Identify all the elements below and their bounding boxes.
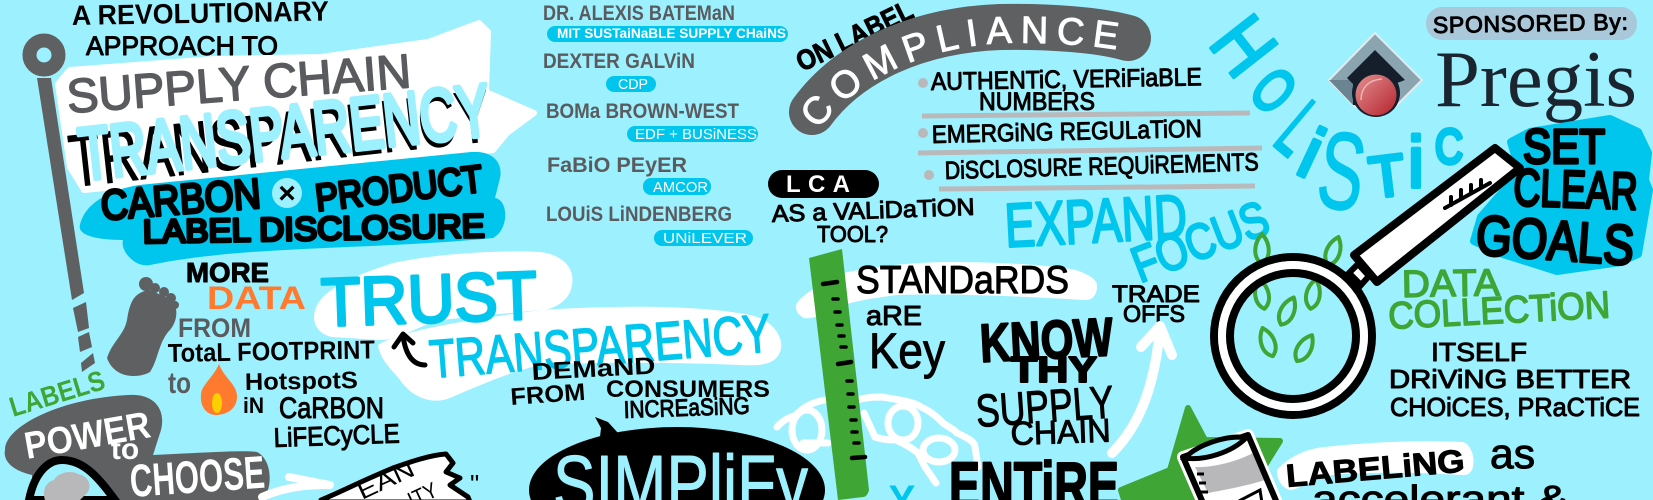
list: compliance points: NUMBERS: [979, 88, 1095, 116]
text: know thy supply chain: SUPPLY: [974, 375, 1115, 437]
panelist: Fabio Peyer: [547, 154, 711, 196]
text: demand from consumers increasing: [510, 353, 770, 424]
icon: flame: [201, 364, 237, 415]
ruler: [809, 249, 869, 500]
chain illustration: [777, 397, 978, 483]
text: standards are key: STANDaRDS: [856, 259, 1069, 302]
blob: set clear goals: SET: [1523, 121, 1605, 174]
text: trade offs: TRADE: [1112, 281, 1200, 308]
heading: holistic: H: [1193, 0, 1294, 93]
text: hotspots in carbon lifecycle: CaRBON: [279, 392, 384, 425]
heading: holistic: L: [1259, 84, 1339, 173]
subtitle band: carbon and product label disclosure: [80, 152, 505, 265]
band behind standards: [796, 262, 1097, 318]
text: know thy supply chain: CHAIN: [1010, 412, 1111, 452]
heading: transparency: [65, 68, 494, 203]
blob: trust: [314, 251, 573, 340]
text: standards are key: [856, 259, 1069, 379]
text: itself driving better choices: [1389, 337, 1640, 422]
subtitle band: carbon and product label disclosure: ×: [278, 177, 296, 210]
panelist: Boma Brown-West: BOMa BROWN-WEST: [546, 100, 739, 123]
panelist: Louis Lindenberg: [546, 203, 753, 247]
subtitle band: carbon and product label disclosure: LABEL DISCLOSURE: [142, 207, 485, 250]
text: standards are key: aRE: [866, 300, 922, 331]
text: trade offs: OFFS: [1123, 301, 1185, 328]
title: a revolutionary approach: APPROACH TO: [86, 31, 278, 61]
blob: power to choose: POWER: [21, 404, 154, 468]
text: standards are key: Key: [869, 323, 945, 379]
leaves: [1253, 234, 1345, 364]
text: know thy supply chain: KNOW: [978, 307, 1114, 374]
text: more data from total footprint: [168, 257, 375, 400]
text: hotspots in carbon lifecycle: LiFECyCLE: [273, 419, 400, 453]
speech burst: ": [470, 469, 479, 499]
panelist: Alexis Bateman: DR. ALEXIS BATEMaN: [543, 2, 735, 25]
heading: holistic: O: [1237, 55, 1309, 127]
speech burst: [321, 454, 479, 500]
text: hotspots in carbon lifecycle: HotspotS: [245, 367, 358, 396]
heading: supply chain: SUPPLY CHAIN: [65, 45, 413, 124]
panelist: Dexter Galvin: CDP: [618, 76, 648, 93]
subtitle band: carbon and product label disclosure: CARBON: [99, 170, 262, 229]
speech bubble: simplify: [529, 417, 825, 500]
arrow: white to speech burst: [262, 477, 330, 497]
text: know thy supply chain: THY: [1011, 349, 1097, 390]
panelist: Dexter Galvin: DEXTER GALViN: [543, 50, 695, 73]
icon: star: [1121, 408, 1280, 500]
list: compliance points: AUTHENTiC, VERiFiaBLE: [931, 63, 1202, 96]
text: expand focus: EXPAND: [1003, 183, 1188, 261]
panelist: Louis Lindenberg: LOUiS LiNDENBERG: [546, 203, 732, 226]
text: more data from total footprint: to: [168, 367, 191, 400]
text: more data from total footprint: MORE: [186, 257, 269, 288]
panelist: Dexter Galvin: [543, 50, 695, 93]
text: demand from consumers increasing: DEMaND: [531, 353, 656, 386]
text: trust: TRUST: [320, 257, 538, 341]
icon: head with cloud: [29, 460, 115, 500]
text: know thy supply chain: [974, 307, 1115, 452]
label: labels: LABELS: [6, 364, 108, 423]
text: labeling as accelerant: LABELiNG: [1284, 443, 1466, 494]
panelist: Boma Brown-West: EDF + BUSiNESS: [635, 126, 757, 143]
heading: holistic: i: [1287, 114, 1335, 193]
heading: transparency: TRANSPARENCY: [75, 68, 494, 196]
icon: magnifying glass: [1214, 148, 1520, 415]
icon: footprint: [107, 277, 179, 376]
panelists list: [543, 2, 788, 247]
text: data collection: COLLECTiON: [1387, 284, 1611, 338]
list: compliance points: EMERGiNG REGULaTiON: [932, 115, 1202, 149]
panelist: Fabio Peyer: FaBiO PEyER: [547, 154, 687, 177]
logo: Pregis: [1329, 33, 1637, 124]
blob: transparency: [378, 307, 781, 401]
text: labeling as accelerant: as: [1490, 430, 1535, 477]
blob: set clear goals: [1474, 119, 1649, 277]
text: itself driving better choices: ITSELF: [1431, 337, 1527, 367]
panelist: Alexis Bateman: MIT SUSTaiNaBLE SUPPLY CHaiNS: [557, 25, 786, 41]
text: expand focus: FOCUS: [1124, 190, 1277, 293]
subtitle band: carbon and product label disclosure: PRODUCT: [313, 158, 485, 220]
panelist: Fabio Peyer: AMCOR: [653, 179, 708, 196]
callout: LCA as a validation tool: TOOL?: [817, 221, 888, 247]
text: data collection: [1387, 262, 1611, 338]
flag banner: [58, 23, 534, 190]
text: hotspots in carbon lifecycle: [243, 367, 400, 453]
heading: holistic: [1193, 0, 1463, 236]
banner: compliance: COMPLIANCE: [803, 16, 1118, 124]
arrow: transparency to trust: [394, 334, 425, 365]
arrow: white up to trade offs: [1112, 326, 1172, 453]
text: demand from consumers increasing: FROM: [510, 379, 586, 411]
heading: transparency: TRANSPARENCY: [65, 74, 494, 203]
text: demand from consumers increasing: INCREaSiNG: [623, 393, 750, 424]
sponsor pill: SPONSORED By:: [1433, 9, 1628, 38]
text: demand from consumers increasing: CONSUMERS: [606, 376, 770, 403]
heading: holistic: T: [1366, 142, 1409, 211]
title: a revolutionary approach: [72, 0, 329, 61]
list: compliance points: DiSCLOSURE REQUiREMENTS: [944, 148, 1259, 185]
text: hotspots in carbon lifecycle: iN: [243, 393, 264, 418]
panelist: Alexis Bateman: [543, 2, 788, 42]
text: more data from total footprint: FROM: [178, 313, 251, 343]
text: data collection: DATA: [1401, 262, 1501, 306]
heading: holistic: i: [1408, 123, 1424, 203]
text: more data from total footprint: DATA: [207, 280, 306, 316]
panelist: Louis Lindenberg: UNiLEVER: [663, 230, 747, 247]
panelist: Boma Brown-West: [546, 100, 758, 143]
heading: holistic: S: [1311, 108, 1373, 236]
blob: power to choose: [5, 395, 270, 500]
text: itself driving better choices: CHOiCES, PRaCTiCE: [1390, 392, 1640, 422]
text: transparency: TRANSPARENCY: [427, 303, 773, 390]
list: compliance points: [918, 63, 1262, 189]
text: trade offs: [1112, 281, 1200, 328]
callout: LCA as a validation tool: [768, 170, 975, 247]
heading: holistic: C: [1435, 121, 1463, 174]
logo: Pregis: Pregis: [1435, 36, 1637, 124]
text: more data from total footprint: TotaL FOOTPRINT: [168, 334, 375, 368]
text: expand focus: [1003, 183, 1277, 293]
blob: power to choose: to: [111, 433, 139, 466]
text: labeling as accelerant: [1277, 430, 1568, 500]
text: itself driving better choices: DRiViNG BETTER: [1389, 364, 1631, 394]
flagpole: [30, 40, 95, 372]
icon: cup with label: [1183, 435, 1277, 500]
callout: LCA as a validation tool: AS a VALiDaTiON: [771, 194, 975, 228]
callout: LCA as a validation tool: LCA: [786, 171, 850, 198]
